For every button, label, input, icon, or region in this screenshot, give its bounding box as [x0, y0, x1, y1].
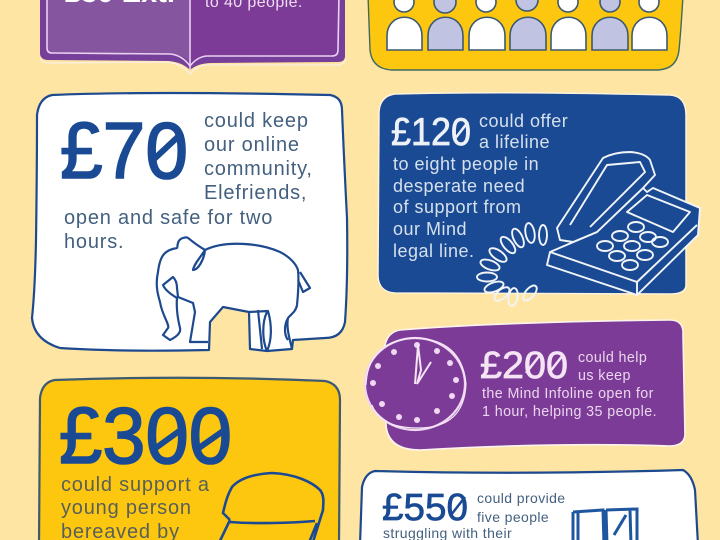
text: £120 description: to eight people in — [393, 154, 539, 174]
text: £120 description: desperate need — [393, 176, 525, 196]
panel: £70 online community — [32, 93, 347, 351]
text: £550 amount: £550 — [382, 487, 468, 529]
panel: yellow people — [368, 0, 683, 70]
text: £200 description: the Mind Infoline open for — [482, 386, 654, 402]
text: £120 description: a lifeline — [479, 132, 550, 152]
text: £70 amount: £70 — [60, 106, 188, 195]
text: £70 description: could keep — [204, 110, 309, 132]
icon: elephant — [157, 237, 310, 351]
text: £120 amount: £120 — [391, 111, 471, 154]
text: £550 description: five people — [477, 509, 549, 525]
text: £550 description: could provide — [477, 490, 565, 506]
text: £70 description: community, — [204, 158, 313, 180]
icon: telephone — [477, 152, 700, 307]
icon: chair — [218, 473, 323, 540]
panel: purple book — [40, 0, 346, 74]
icon: clock hands — [415, 345, 431, 384]
text: £120 description: legal line. — [393, 241, 475, 261]
text: £70 description: open and safe for two — [64, 207, 273, 229]
text: £70 description: hours. — [64, 231, 124, 253]
text: £300 amount: £300 — [59, 391, 232, 480]
text: £200 description: could help — [578, 350, 647, 366]
panel: £200 infoline — [365, 320, 685, 450]
text: £300 description: young person — [61, 497, 192, 519]
text: £70 description: our online — [204, 134, 300, 156]
icon: clock — [365, 338, 466, 430]
text: £200 description: us keep — [578, 368, 631, 384]
text: £200 amount: £200 — [480, 345, 568, 387]
text: £300 description: could support a — [61, 474, 210, 496]
text: £70 description: Elefriends, — [204, 182, 307, 204]
icon: people row — [387, 0, 667, 50]
panel: £120 lifeline — [378, 93, 700, 307]
text: £120 description: of support from — [393, 197, 522, 217]
icon: folding screen — [573, 509, 637, 540]
text: £200 description: 1 hour, helping 35 people. — [482, 404, 657, 420]
text: £120 description: our Mind — [393, 219, 467, 239]
panel: £550 support — [360, 470, 698, 540]
panel: £300 bereaved — [39, 378, 340, 540]
text: £120 description: could offer — [479, 111, 568, 131]
